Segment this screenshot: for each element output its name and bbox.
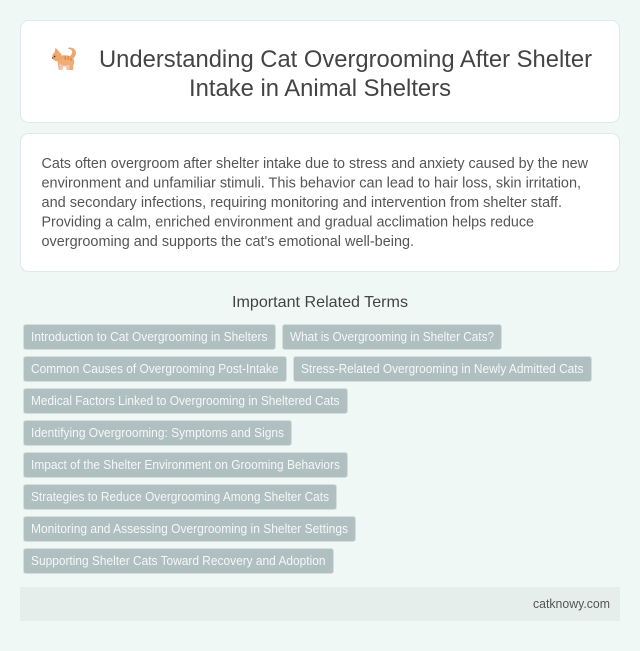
tag: strategies: Strategies to Reduce Overgrooming Among Shelter Cats bbox=[31, 490, 329, 504]
description text: Providing a calm, enriched environment and gradual acclimation helps reduce bbox=[42, 214, 534, 230]
tag: identifying: Identifying Overgrooming: Symptoms and Signs bbox=[31, 426, 284, 440]
tag: strategies bbox=[24, 484, 336, 510]
panel: related terms tags bbox=[24, 324, 592, 574]
tag: stress-related bbox=[294, 356, 592, 382]
heading: important related terms: Important Related Terms bbox=[232, 294, 408, 311]
tag: introduction bbox=[24, 324, 276, 350]
title text: Understanding Cat Overgrooming After Shelter bbox=[99, 46, 592, 73]
tag: medical factors: Medical Factors Linked to Overgrooming in Sheltered Cats bbox=[31, 394, 340, 408]
panel: title card bbox=[20, 20, 620, 122]
tag: impact bbox=[24, 452, 348, 478]
tag: stress-related: Stress-Related Overgrooming in Newly Admitted Cats bbox=[301, 362, 584, 376]
tag: common causes: Common Causes of Overgrooming Post-Intake bbox=[31, 362, 278, 376]
icon: cat bbox=[52, 47, 76, 70]
description text bbox=[42, 156, 589, 250]
tag: what is overgrooming: What is Overgrooming in Shelter Cats? bbox=[290, 330, 494, 344]
tag: monitoring bbox=[24, 516, 356, 542]
title text bbox=[99, 46, 592, 102]
tag: supporting: Supporting Shelter Cats Toward Recovery and Adoption bbox=[31, 554, 326, 568]
description text: environment and unfamiliar stimuli. This behavior can lead to hair loss, skin irritation, bbox=[42, 176, 581, 192]
title text: Intake in Animal Shelters bbox=[189, 75, 451, 102]
tag: common causes bbox=[24, 356, 286, 382]
description text: and secondary infections, requiring monitoring and intervention from shelter staff. bbox=[42, 195, 562, 211]
tag: medical factors bbox=[24, 388, 348, 414]
footer site name: catknowy.com bbox=[533, 596, 610, 611]
footer bar bbox=[20, 587, 620, 621]
tag: impact: Impact of the Shelter Environment on Grooming Behaviors bbox=[31, 458, 340, 472]
tag: monitoring: Monitoring and Assessing Overgrooming in Shelter Settings bbox=[31, 522, 348, 536]
description text: overgrooming and supports the cat's emotional well-being. bbox=[42, 234, 414, 250]
description text: Cats often overgroom after shelter intake due to stress and anxiety caused by the new bbox=[42, 156, 589, 172]
tag: supporting bbox=[24, 548, 334, 574]
tag: introduction: Introduction to Cat Overgrooming in Shelters bbox=[31, 330, 268, 344]
tag: identifying bbox=[24, 420, 292, 446]
tag: what is overgrooming bbox=[282, 324, 502, 350]
panel: description card bbox=[20, 134, 620, 272]
